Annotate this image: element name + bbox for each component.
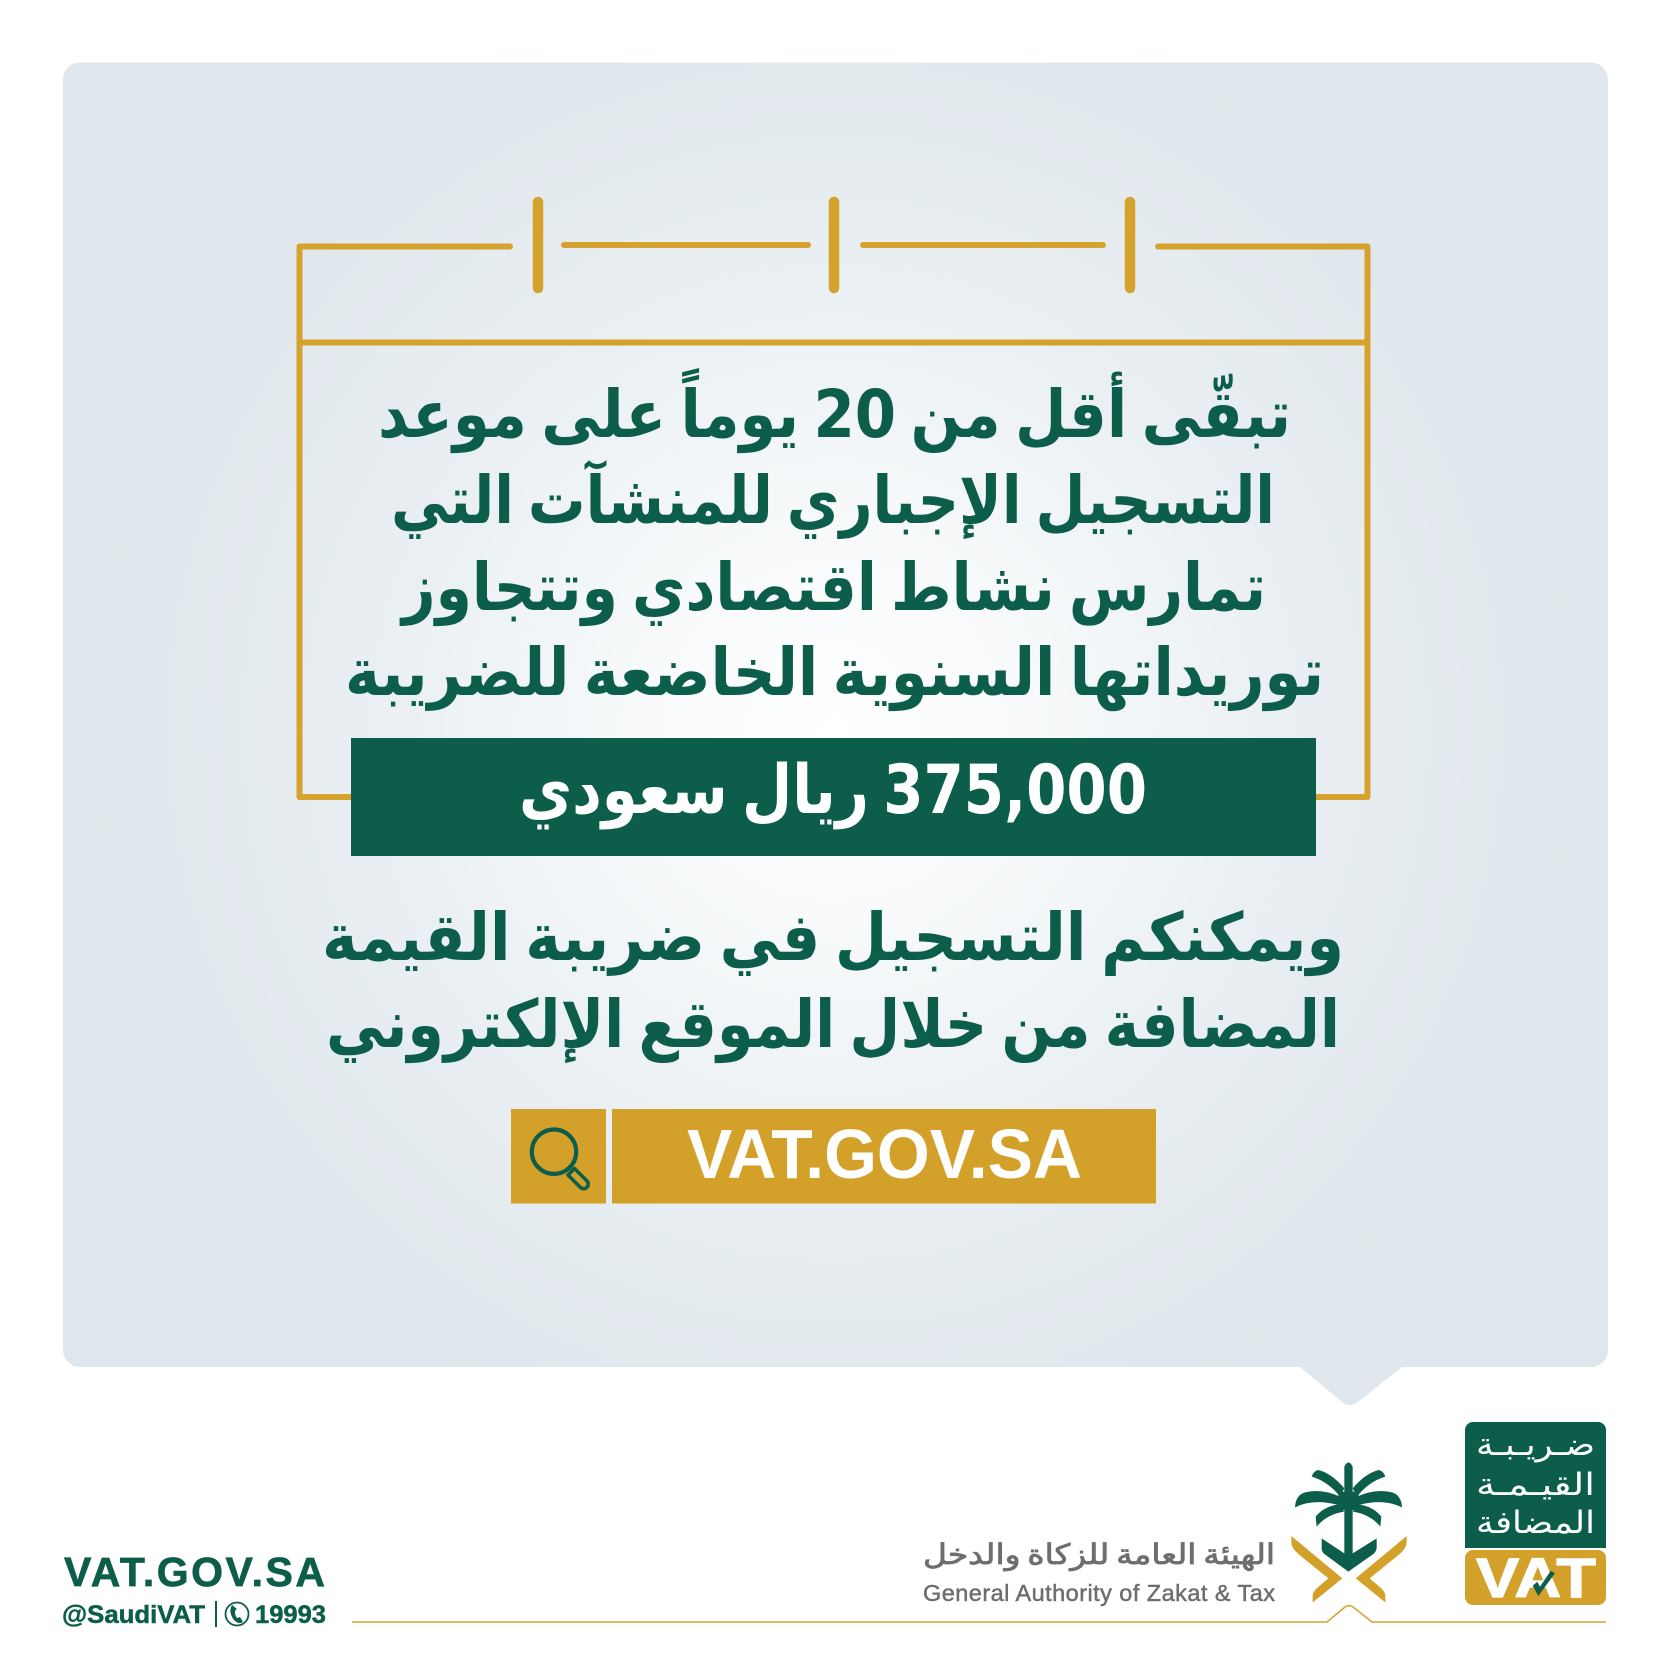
- main message text: التسجيل الإجباري للمنشآت التي: [391, 459, 1275, 540]
- registration text: ويمكنكم التسجيل في ضريبة القيمة: [322, 899, 1344, 977]
- website box: VAT.GOV.SA: [687, 1115, 1082, 1193]
- icon: palm and swords emblem: [1291, 1462, 1407, 1602]
- website box: [612, 1109, 1156, 1204]
- footer contact: @SaudiVAT: [62, 1601, 205, 1629]
- panel: speech bubble background: [63, 62, 1608, 1405]
- authority name: الهيئة العامة للزكاة والدخل: [923, 1538, 1275, 1571]
- footer contact: [62, 1549, 326, 1629]
- amount bar: 375,000 ريال سعودي: [519, 751, 1147, 830]
- main message text: تبقّى أقل من 20 يوماً على موعد: [378, 367, 1291, 454]
- authority name: [923, 1538, 1275, 1606]
- authority name: General Authority of Zakat & Tax: [923, 1580, 1275, 1606]
- main message text: تمارس نشاط اقتصادي وتتجاوز: [399, 549, 1266, 627]
- amount bar: [351, 738, 1316, 856]
- icon: phone: [226, 1602, 248, 1626]
- calendar frame: [299, 202, 1368, 797]
- logo: VAT badge: ضـريـبـة: [1476, 1427, 1595, 1463]
- footer contact: 19993: [255, 1601, 326, 1629]
- footer contact: VAT.GOV.SA: [64, 1549, 325, 1595]
- main message text: توريداتها السنوية الخاضعة للضريبة: [345, 634, 1324, 712]
- main message text: [345, 367, 1324, 712]
- registration text: [322, 899, 1344, 1064]
- footer rule: [352, 1606, 1606, 1622]
- icon: magnifier box: [511, 1109, 606, 1204]
- logo: VAT badge: المضافة: [1476, 1505, 1595, 1541]
- logo: VAT badge: [1465, 1422, 1606, 1609]
- icon: check mark: [1533, 1571, 1555, 1596]
- registration text: المضافة من خلال الموقع الإلكتروني: [326, 986, 1340, 1064]
- logo: VAT badge: VAT: [1476, 1546, 1596, 1609]
- logo: VAT badge: القيـمـة: [1476, 1467, 1595, 1503]
